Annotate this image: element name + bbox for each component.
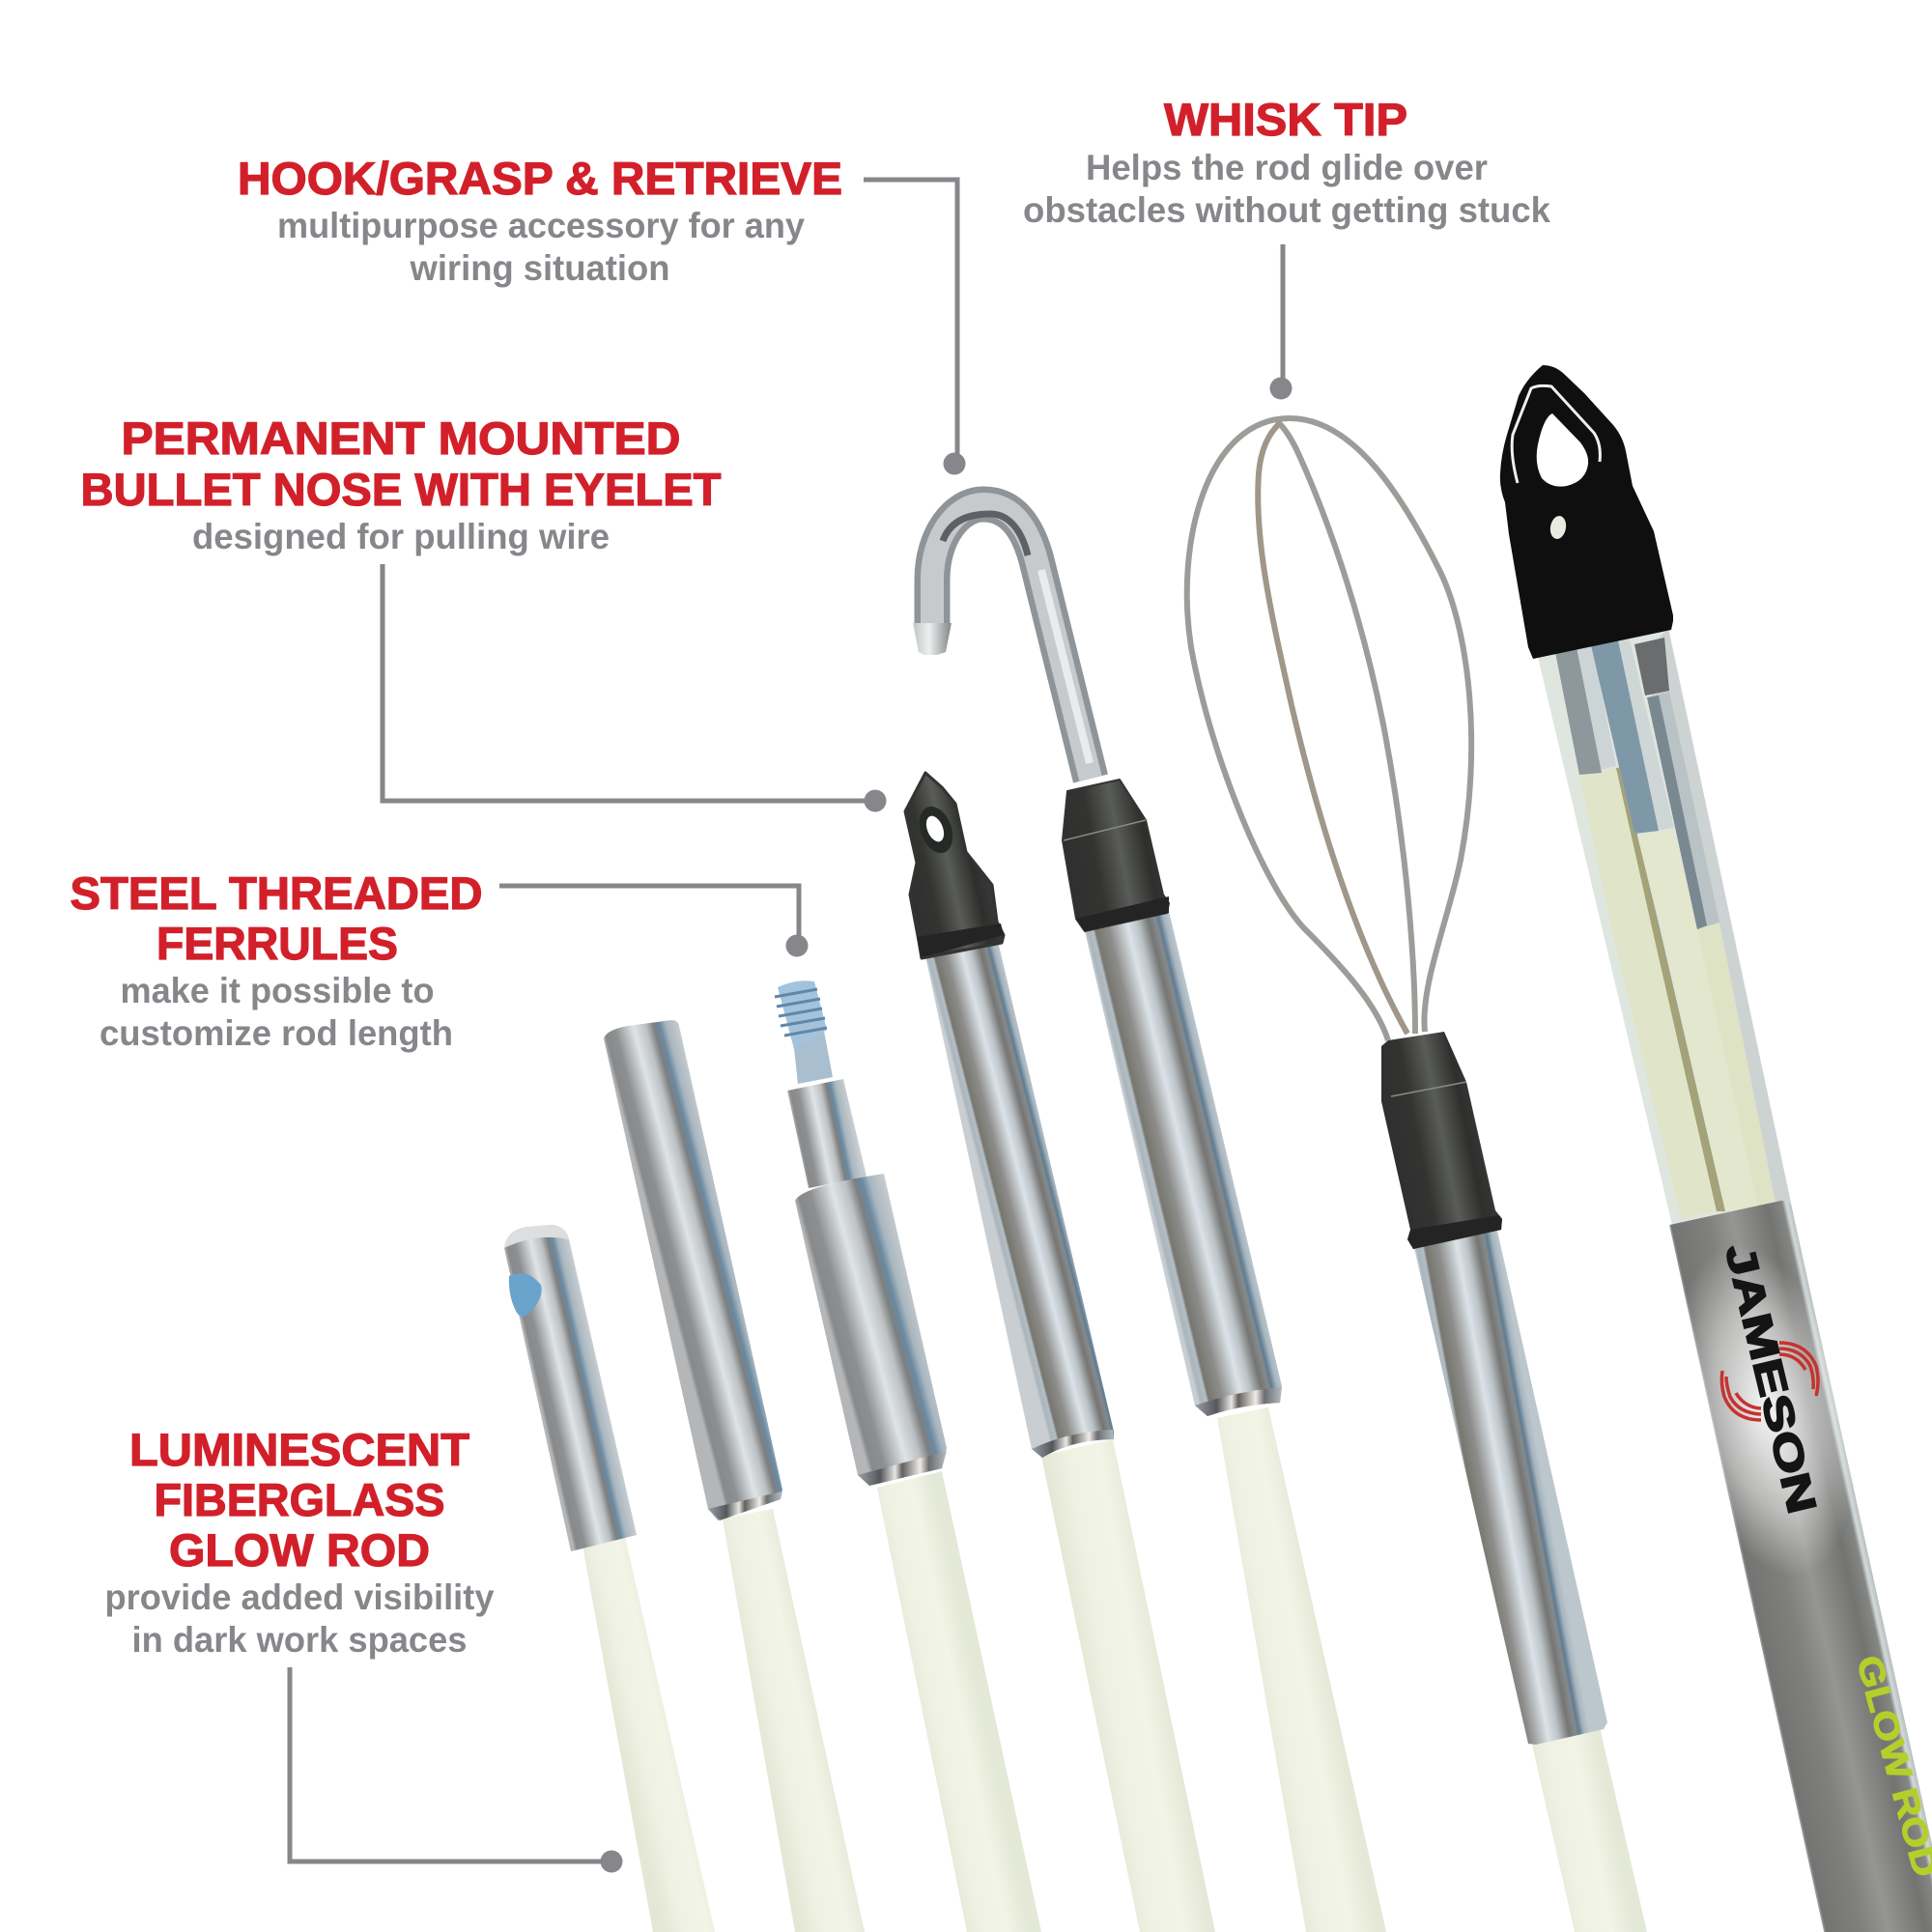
product label xyxy=(1648,1201,1932,1932)
rod 5 steel hook xyxy=(913,504,1091,779)
heading block: luminescent fiberglass glow rod: LUMINESCENT xyxy=(129,1424,469,1475)
black dipped bullet cap xyxy=(1500,365,1673,659)
heading block: hook/grasp and retrieve xyxy=(238,153,842,288)
rod 3 large ferrule xyxy=(795,1174,947,1486)
rod 5: hook tip xyxy=(913,504,1386,1932)
heading block: luminescent fiberglass glow rod xyxy=(104,1424,495,1660)
callout: fiberglass leader line xyxy=(290,1667,622,1872)
rod 5 steel ferrule xyxy=(1085,911,1282,1416)
rod 1: ferrule with blue-marked hole xyxy=(504,1225,715,1932)
rod 4 black bullet nose xyxy=(905,773,1004,958)
heading block: steel threaded ferrules: make it possible to xyxy=(120,971,435,1010)
rod 4 eyelet hole xyxy=(923,813,948,844)
tube glass body xyxy=(1538,628,1792,1229)
heading block: permanent mounted bullet nose: designed for pulling wire xyxy=(192,517,610,556)
rod 3 fiberglass shaft xyxy=(877,1471,1041,1932)
heading block: steel threaded ferrules: customize rod length xyxy=(99,1013,453,1053)
callout: hook/grasp leader line xyxy=(864,180,966,475)
rod 2 steel ferrule xyxy=(604,1020,782,1520)
rod 1 blue spot xyxy=(509,1273,542,1317)
rod 5 black collar xyxy=(1063,780,1169,931)
callout: bullet nose leader line xyxy=(383,564,887,811)
rod 4: bullet nose with eyelet xyxy=(905,773,1215,1932)
stored metal ferrules xyxy=(1555,638,1719,929)
clear storage tube with rods xyxy=(1500,365,1932,1932)
heading block: permanent mounted bullet nose: PERMANENT MOUNTED xyxy=(122,412,680,464)
heading block: permanent mounted bullet nose xyxy=(81,412,722,556)
heading block: permanent mounted bullet nose: BULLET NOSE WITH EYELET xyxy=(81,464,722,515)
rod 6 steel ferrule xyxy=(1414,1231,1607,1745)
heading block: whisk tip: Helps the rod glide over xyxy=(1086,148,1488,187)
heading block: hook/grasp and retrieve: wiring situation xyxy=(410,248,670,288)
rod 6 fiberglass shaft xyxy=(1532,1727,1647,1932)
heading block: hook/grasp and retrieve: multipurpose accessory for any xyxy=(277,206,805,245)
logo swoosh xyxy=(1721,1343,1818,1420)
heading block: luminescent fiberglass glow rod: GLOW ROD xyxy=(169,1524,430,1576)
rod 6 black collar xyxy=(1381,1032,1502,1249)
rod 5 fiberglass shaft xyxy=(1217,1407,1386,1932)
heading block: hook/grasp and retrieve: HOOK/GRASP & RETRIEVE xyxy=(238,153,842,204)
logo wordmark: JAMESON xyxy=(1717,1239,1825,1518)
rod 3 threaded stud xyxy=(775,980,833,1084)
rod 2: plain steel ferrule xyxy=(604,1020,865,1932)
heading block: steel threaded ferrules: FERRULES xyxy=(156,918,398,969)
rod 6: whisk tip xyxy=(1187,418,1647,1932)
rod 2 fiberglass shaft xyxy=(723,1509,865,1932)
heading block: whisk tip xyxy=(1023,94,1550,230)
callout: whisk tip leader line xyxy=(1269,244,1293,400)
heading block: steel threaded ferrules: STEEL THREADED xyxy=(70,867,483,919)
heading block: luminescent fiberglass glow rod: FIBERGLASS xyxy=(155,1474,444,1525)
rod 3: threaded ferrule xyxy=(775,980,1041,1932)
rod 4 fiberglass shaft xyxy=(1041,1439,1215,1932)
heading block: whisk tip: obstacles without getting stuck xyxy=(1023,190,1550,230)
rod 1 steel ferrule xyxy=(504,1225,637,1551)
heading block: whisk tip: WHISK TIP xyxy=(1164,94,1407,145)
rod 3 collar xyxy=(787,1079,867,1188)
rod 1 fiberglass shaft xyxy=(582,1537,715,1932)
rod 6 whisk wires xyxy=(1187,418,1471,1040)
rod 4 steel ferrule xyxy=(924,933,1114,1458)
heading block: steel threaded ferrules xyxy=(70,867,483,1053)
heading block: luminescent fiberglass glow rod: in dark work spaces xyxy=(131,1620,468,1660)
heading block: luminescent fiberglass glow rod: provide added visibility xyxy=(104,1577,495,1617)
callout: ferrules leader line xyxy=(499,886,808,956)
stored fiberglass rods xyxy=(1579,765,1776,1219)
